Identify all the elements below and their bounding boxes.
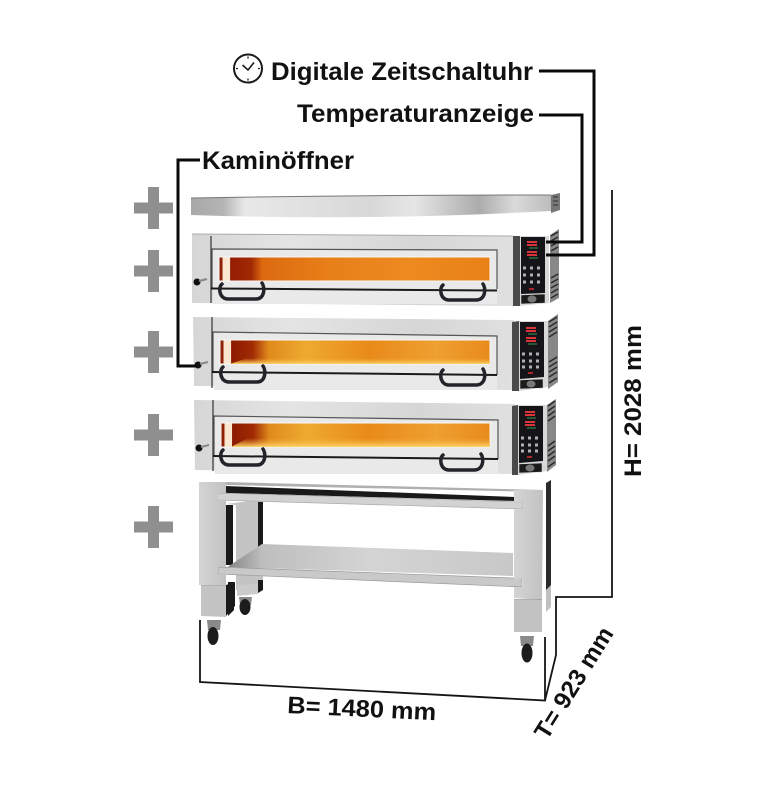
icon: plus oven 3 bbox=[134, 414, 173, 456]
label: Kaminöffner: Kaminöffner bbox=[202, 147, 354, 175]
knob bbox=[194, 362, 202, 368]
shelf bbox=[228, 544, 513, 576]
oven 1 bbox=[192, 229, 559, 306]
label: Digitale Zeitschaltuhr: Digitale Zeitschaltuhr bbox=[271, 58, 533, 86]
control panel bbox=[512, 314, 558, 391]
door frame bbox=[214, 416, 498, 474]
oven window bbox=[220, 340, 490, 364]
dimension: height: H= 2028 mm bbox=[620, 325, 647, 477]
oven window bbox=[221, 423, 490, 447]
top plate bbox=[191, 193, 560, 217]
icon: clock bbox=[234, 54, 262, 82]
control panel bbox=[512, 399, 556, 475]
top frame bbox=[225, 482, 543, 492]
label: Temperaturanzeige: Temperaturanzeige bbox=[297, 100, 534, 128]
icon: plus oven 1 bbox=[134, 250, 173, 292]
right leg bbox=[514, 490, 543, 600]
dimension: width: B= 1480 mm bbox=[287, 692, 437, 726]
oven 3 bbox=[194, 399, 556, 475]
icon: plus oven 2 bbox=[134, 331, 173, 373]
left leg bbox=[199, 482, 226, 585]
handles bbox=[220, 283, 485, 300]
stand bbox=[199, 480, 551, 662]
handles bbox=[221, 449, 483, 470]
door frame bbox=[212, 249, 497, 304]
casters bbox=[207, 597, 534, 662]
knob bbox=[194, 278, 200, 286]
oven window bbox=[219, 257, 490, 281]
icon: plus top plate bbox=[134, 187, 173, 229]
leader lines bbox=[178, 71, 594, 366]
handles bbox=[221, 366, 485, 385]
dimension lines bbox=[200, 190, 612, 700]
oven 2 bbox=[193, 314, 558, 391]
door frame bbox=[213, 332, 497, 390]
knob bbox=[196, 444, 202, 452]
back leg bbox=[226, 500, 263, 590]
dimension: depth: T= 923 mm bbox=[529, 622, 619, 744]
control panel bbox=[513, 229, 559, 306]
icon: plus stand bbox=[134, 506, 173, 548]
